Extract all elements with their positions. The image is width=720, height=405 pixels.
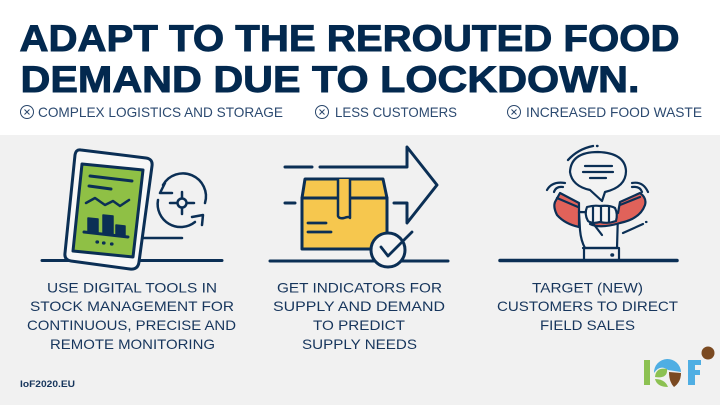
problem: food waste: INCREASED FOOD WASTE — [526, 105, 702, 120]
caption: digital tools — [27, 280, 236, 352]
problem list — [20, 105, 702, 120]
footer url: IoF2020.EU — [20, 379, 75, 390]
caption: indicators: GET INDICATORS FOR — [277, 280, 442, 296]
icon: hand holding phone with speech bubble — [500, 146, 677, 260]
caption: digital tools: CONTINUOUS, PRECISE AND — [27, 317, 236, 333]
title — [20, 18, 680, 100]
logo: IoF — [644, 346, 714, 387]
caption: customers: TARGET (NEW) — [532, 280, 643, 296]
icon: box with arrow and check — [270, 147, 448, 267]
caption: digital tools: STOCK MANAGEMENT FOR — [30, 298, 234, 314]
caption: digital tools: REMOTE MONITORING — [50, 336, 215, 352]
caption: customers — [497, 280, 678, 333]
problem: less customers: LESS CUSTOMERS — [335, 105, 457, 120]
caption: indicators: SUPPLY NEEDS — [302, 336, 417, 352]
caption: customers: CUSTOMERS TO DIRECT — [497, 298, 678, 314]
caption: customers: FIELD SALES — [540, 317, 635, 333]
caption: indicators: TO PREDICT — [313, 317, 405, 333]
caption: digital tools: USE DIGITAL TOOLS IN — [47, 280, 217, 296]
title: ADAPT TO THE REROUTED FOOD — [20, 18, 680, 59]
caption: indicators — [273, 280, 445, 352]
icon: tablet with monitoring — [42, 150, 222, 269]
problem: complex logistics: COMPLEX LOGISTICS AND STORAGE — [38, 105, 283, 120]
title: DEMAND DUE TO LOCKDOWN. — [20, 59, 640, 100]
caption: indicators: SUPPLY AND DEMAND — [273, 298, 445, 314]
